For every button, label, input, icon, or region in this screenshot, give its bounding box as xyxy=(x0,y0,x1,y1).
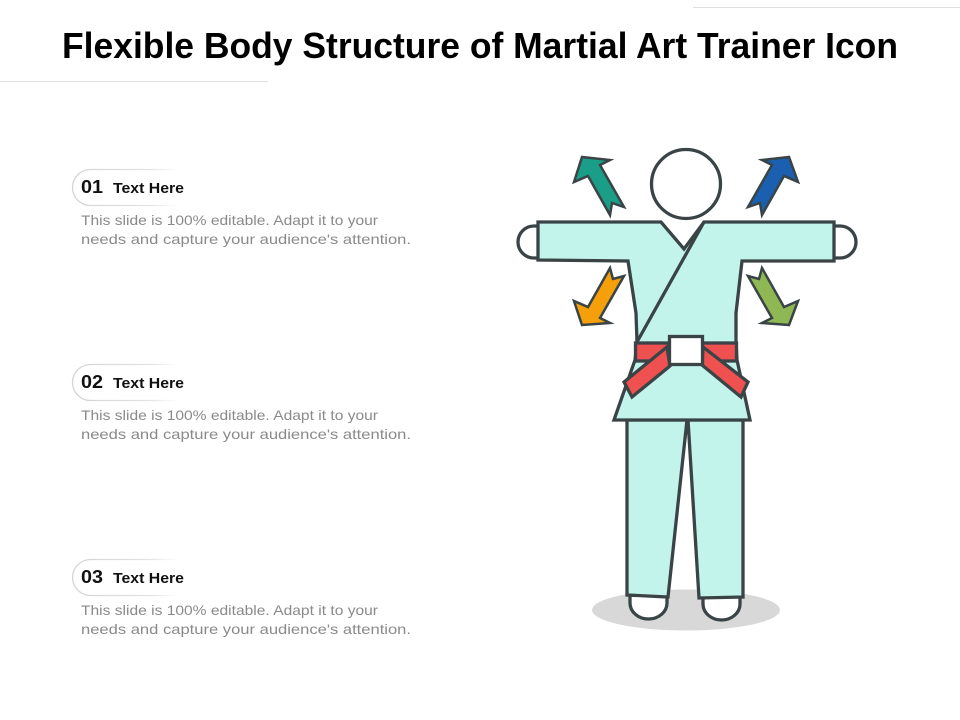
head xyxy=(652,150,720,218)
pill label 01: Text Here xyxy=(113,181,184,197)
description 01: This slide is 100% editable. Adapt it to your xyxy=(81,212,378,228)
arrow: teal up-left xyxy=(574,157,624,215)
arrow: blue up-right xyxy=(748,157,798,215)
right hand xyxy=(834,226,856,258)
arrow: orange down-left xyxy=(574,268,624,325)
belt band xyxy=(636,343,736,361)
description 03: This slide is 100% editable. Adapt it to your xyxy=(81,602,378,618)
description 03 xyxy=(81,602,411,637)
left hand xyxy=(518,226,538,258)
jacket xyxy=(538,222,834,420)
jacket lapel line xyxy=(637,222,704,342)
trousers xyxy=(627,420,743,598)
description 03: needs and capture your audience's attention. xyxy=(81,621,411,637)
martial art trainer figure xyxy=(518,150,856,630)
pill label 03: Text Here xyxy=(113,571,184,587)
pill label 01: 01 xyxy=(81,177,103,197)
pill label 01 xyxy=(72,170,184,206)
text block 01 xyxy=(72,170,411,247)
pill label 02: Text Here xyxy=(113,376,184,392)
pill label 03: 03 xyxy=(81,567,103,587)
text block 02 xyxy=(72,364,411,442)
right foot xyxy=(703,598,740,620)
belt tail left xyxy=(624,347,670,397)
belt knot xyxy=(670,336,702,364)
description 02 xyxy=(81,407,411,442)
ground shadow xyxy=(592,590,780,630)
belt tail right xyxy=(702,347,748,397)
left foot xyxy=(630,595,667,619)
pill label 02 xyxy=(72,364,184,400)
text block 03 xyxy=(73,560,411,637)
description 02: This slide is 100% editable. Adapt it to your xyxy=(81,407,378,423)
description 02: needs and capture your audience's attention. xyxy=(81,426,411,442)
arrow: green down-right xyxy=(748,268,798,325)
pill label 02: 02 xyxy=(81,372,103,392)
description 01: needs and capture your audience's attention. xyxy=(81,231,411,247)
title: Flexible Body Structure of Martial Art Trainer Icon xyxy=(62,25,898,66)
pill label 03 xyxy=(73,560,184,596)
description 01 xyxy=(81,212,411,247)
